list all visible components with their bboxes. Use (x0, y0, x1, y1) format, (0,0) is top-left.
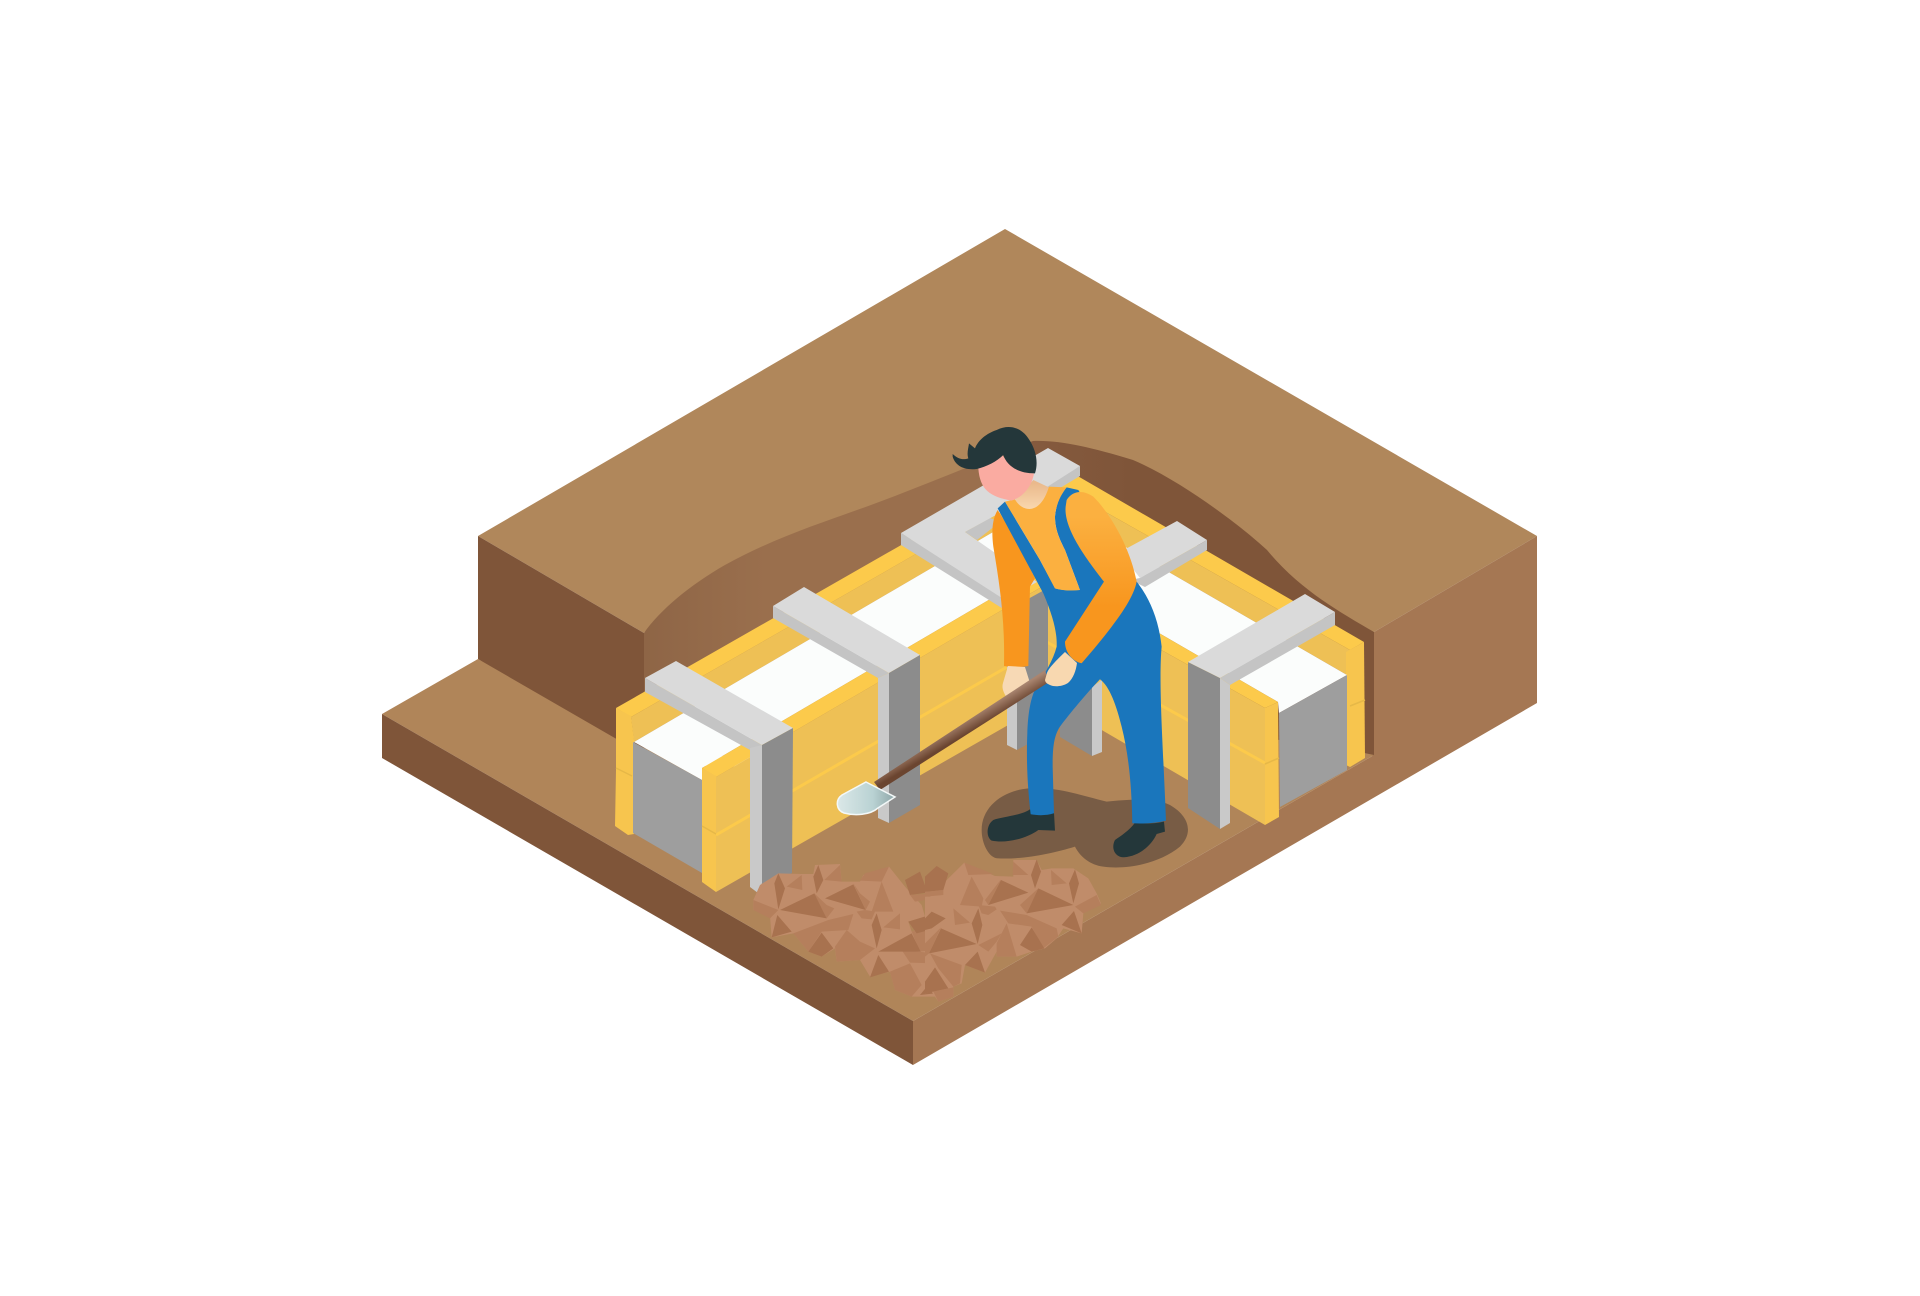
front run outer face (716, 585, 1045, 892)
front plank end, right (1265, 702, 1279, 825)
crossbar post beside leg (1060, 680, 1102, 756)
post below L form (1007, 588, 1048, 750)
left cut face (478, 536, 644, 770)
lower step front face (382, 714, 913, 1065)
shoes (988, 809, 1165, 857)
foundation formwork (615, 448, 1365, 893)
shirt torso (1005, 487, 1080, 590)
upper ground surface (478, 229, 1537, 633)
concrete end, left (633, 742, 702, 873)
worker figure (953, 427, 1166, 857)
worker ground shadow (982, 788, 1188, 867)
sleeve: far arm (992, 510, 1035, 667)
face (978, 455, 1034, 501)
rubble pile, left half (753, 864, 935, 997)
light inner facets (910, 963, 935, 983)
back plank end, right (1346, 642, 1365, 767)
far hand (1002, 666, 1030, 698)
right outer face of ground block (913, 536, 1537, 1065)
trench back wall (644, 400, 1374, 756)
L form shaded faces (901, 466, 1080, 610)
plank divider lines (716, 641, 1265, 835)
shovel handle (874, 670, 1049, 790)
front plank end, left (702, 768, 716, 892)
hair (953, 427, 1037, 473)
concrete top surface (634, 501, 1347, 780)
mid strip under dark fragment (910, 893, 935, 902)
back plank top strip (616, 460, 1364, 717)
dark facets (772, 865, 935, 995)
crossbar: back right (1120, 521, 1207, 587)
shovel blade (837, 782, 895, 815)
back plank inner face (631, 479, 1350, 742)
crossbar: L-shaped top form (901, 448, 1080, 750)
front plank top strip (702, 567, 1278, 777)
L form top face (901, 448, 1080, 600)
right run outer face (1045, 585, 1265, 825)
near hand on handle (1045, 652, 1077, 686)
rubble base mass (925, 860, 1101, 1002)
rubble pile, right half (925, 859, 1101, 1002)
neck (1015, 480, 1049, 509)
crossbar: first on front run (645, 661, 793, 893)
sleeve: near arm (1065, 492, 1137, 663)
dark facets (925, 859, 1082, 993)
rubble base mass (753, 864, 935, 997)
mid-tone facets (925, 862, 1101, 1002)
plank end notches (616, 700, 1365, 834)
mid-tone facets (753, 865, 935, 997)
back plank end, left (615, 708, 634, 835)
crossbar: second on front run (773, 587, 920, 823)
shovel (837, 670, 1049, 815)
crossbar: front right (1188, 594, 1335, 829)
trench floor and lower step (382, 659, 1374, 1021)
blue overalls (998, 487, 1166, 824)
concrete end, right (1279, 675, 1347, 807)
